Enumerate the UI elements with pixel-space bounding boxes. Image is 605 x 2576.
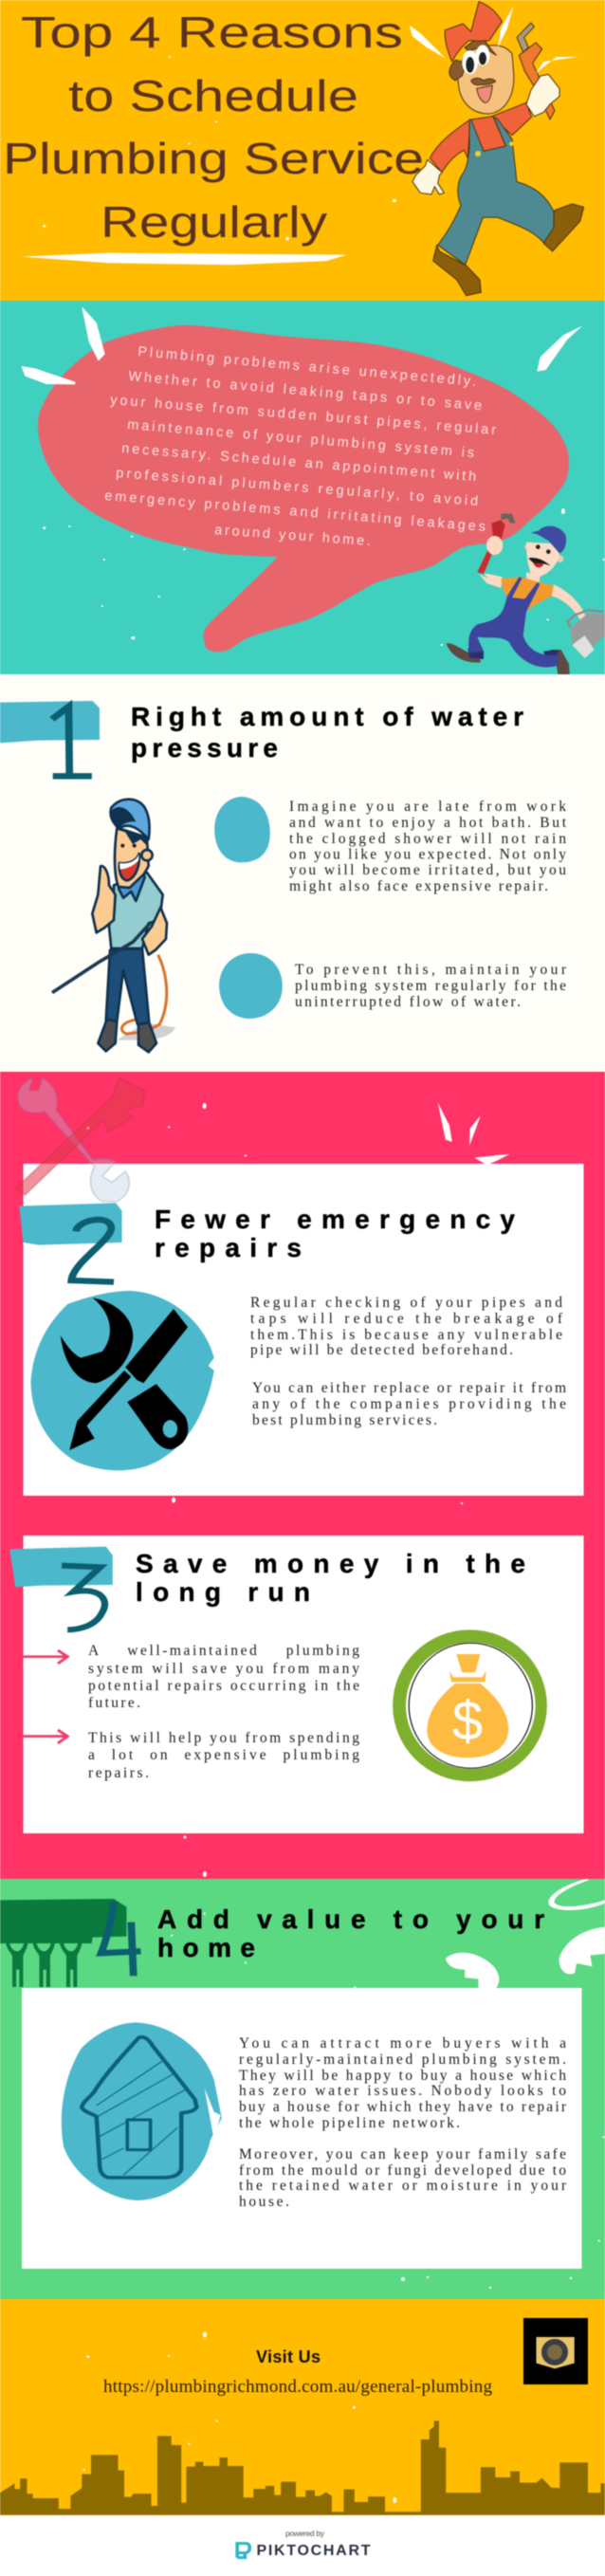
number 4	[101, 1902, 140, 1976]
decorative white brush marks and sparkles	[21, 306, 605, 646]
text block: has zero water issues. Nobody looks to	[239, 2083, 566, 2099]
text block: them.This is because any vulnerable	[250, 1327, 562, 1343]
bullet blob 1	[214, 797, 270, 862]
speech bubble	[38, 325, 569, 652]
heading 1: Right amount of water	[131, 702, 523, 731]
heading 3: Save money in the	[136, 1549, 525, 1578]
icon: cartoon plumber with wrench	[412, 2, 584, 296]
text block 2	[295, 962, 567, 1010]
heading 2	[155, 1205, 515, 1262]
text block: the whole pipeline network.	[239, 2115, 460, 2131]
intro paragraph: emergency problems and irritating leakages	[104, 488, 486, 535]
text block: Moreover, you can keep your family safe	[239, 2146, 566, 2162]
logo badge	[523, 2318, 588, 2384]
text block: taps will reduce the breakage of	[250, 1311, 563, 1327]
text block 1: might also face expensive repair.	[289, 878, 548, 894]
text block 1: on you like you expected. Not only	[289, 846, 566, 863]
text block: any of the companies providing the	[252, 1396, 566, 1412]
text block: pipe will be detected beforehand.	[250, 1342, 513, 1358]
text block 1: Imagine you are late from work	[289, 799, 566, 815]
title	[3, 8, 424, 247]
text block: best plumbing services.	[252, 1412, 437, 1428]
heading 2: Fewer emergency	[155, 1205, 515, 1234]
intro paragraph	[104, 344, 497, 549]
sparkles	[401, 2276, 572, 2289]
heading 3	[136, 1549, 525, 1607]
heading 4: Add value to your	[157, 1904, 544, 1934]
text block 1: the clogged shower will not rain	[289, 831, 566, 847]
intro paragraph: professional plumbers regularly, to avoid	[116, 466, 479, 509]
heading 4	[157, 1904, 544, 1962]
section: footer call to action	[0, 2299, 605, 2515]
intro paragraph: maintenance of your plumbing system is	[127, 417, 475, 461]
text block: Regular checking of your pipes and	[250, 1295, 562, 1311]
text block: regularly-maintained plumbing system.	[239, 2052, 566, 2068]
heading 4: home	[157, 1933, 255, 1962]
text block: You can either replace or repair it from	[252, 1380, 566, 1396]
title: Top 4 Reasons	[21, 8, 403, 57]
heading 1: pressure	[131, 733, 278, 763]
number badge 1	[0, 701, 100, 776]
section: reason 4	[0, 1879, 605, 2299]
section: reasons 2 and 3 background	[0, 1072, 605, 1880]
title: Regularly	[101, 197, 327, 247]
intro paragraph: Whether to avoid leaking taps or to save	[128, 369, 483, 414]
arrow 2	[23, 1730, 67, 1743]
sparkles	[82, 2332, 396, 2503]
text block	[250, 1295, 566, 1428]
section: header	[0, 0, 605, 302]
text block: They will be happy to buy a house which	[239, 2068, 566, 2084]
text block: the retained water or moisture in your	[239, 2178, 567, 2194]
title underline brush stroke	[21, 253, 347, 265]
text block: from the mould or fungi developed due to	[239, 2162, 566, 2179]
text block 2: To prevent this, maintain your	[295, 962, 567, 978]
sparkles	[184, 1836, 207, 1877]
text block: repairs.	[88, 1765, 149, 1781]
text block	[88, 1643, 359, 1781]
website url: https://plumbingrichmond.com.au/general-plumbing	[103, 2377, 493, 2397]
number badge 2	[19, 1203, 122, 1282]
dollar sign: $	[452, 1690, 483, 1752]
text block 1: you will become irritated, but you	[289, 862, 566, 878]
heading 2: repairs	[155, 1233, 302, 1262]
icon: money bag in green ring	[393, 1629, 547, 1781]
powered by piktochart footer	[0, 2515, 605, 2576]
visit us label: Visit Us	[256, 2347, 321, 2366]
powered by label: powered by	[285, 2529, 325, 2538]
icon: crossed wrenches	[15, 1078, 145, 1202]
text block 1	[289, 799, 567, 894]
text block: future.	[88, 1695, 140, 1711]
icon: sketched house on blue blob	[62, 2022, 222, 2200]
icon: piktochart logo	[237, 2544, 249, 2558]
number badge 3	[9, 1547, 113, 1629]
text block: You can attract more buyers with a	[239, 2035, 566, 2052]
panel: reason 4	[22, 1988, 582, 2269]
icon: running plumber with toolbox	[447, 514, 605, 674]
text block: buy a house for which they have to repair	[239, 2099, 567, 2115]
text block: system will save you from many	[88, 1661, 359, 1677]
decorative white brush marks	[43, 6, 578, 240]
title: Plumbing Service	[3, 134, 424, 183]
text block 1: and want to enjoy a hot bath. But	[289, 815, 567, 831]
text block: house.	[239, 2194, 289, 2210]
text block	[239, 2035, 567, 2210]
piktochart wordmark: PIKTOCHART	[256, 2543, 371, 2559]
decorative white brush marks and sparkles	[86, 1103, 510, 1504]
title: to Schedule	[68, 71, 358, 120]
skyline	[0, 2420, 605, 2515]
heading 3: long run	[136, 1577, 310, 1607]
icon: plumber with pressure washer	[52, 800, 175, 1052]
intro paragraph: your house from sudden burst pipes, regular	[110, 393, 497, 438]
section: reason 1	[0, 674, 605, 1073]
heading 1	[131, 702, 523, 763]
icon: people lifting number banner	[0, 1899, 126, 1987]
panel: reason 2	[15, 1078, 584, 1496]
intro paragraph: Plumbing problems arise unexpectedly.	[138, 344, 477, 390]
text block 2: uninterrupted flow of water.	[295, 994, 521, 1010]
arrow 1	[23, 1650, 67, 1664]
text block 2: plumbing system regularly for the	[295, 978, 566, 994]
text block: A well-maintained plumbing	[88, 1643, 359, 1659]
text block: a lot on expensive plumbing	[88, 1747, 359, 1763]
bullet blob 2	[219, 953, 283, 1019]
icon: wrench and screwdriver on blue blob	[31, 1291, 214, 1470]
intro paragraph: necessary. Schedule an appointment with	[121, 441, 477, 485]
decorative white swirls and wings	[171, 1879, 605, 2242]
section: intro	[0, 301, 605, 674]
text block: This will help you from spending	[88, 1730, 359, 1746]
panel: reason 3	[9, 1536, 584, 1833]
text block: potential repairs occurring in the	[88, 1678, 359, 1694]
intro paragraph: around your home.	[214, 523, 371, 549]
